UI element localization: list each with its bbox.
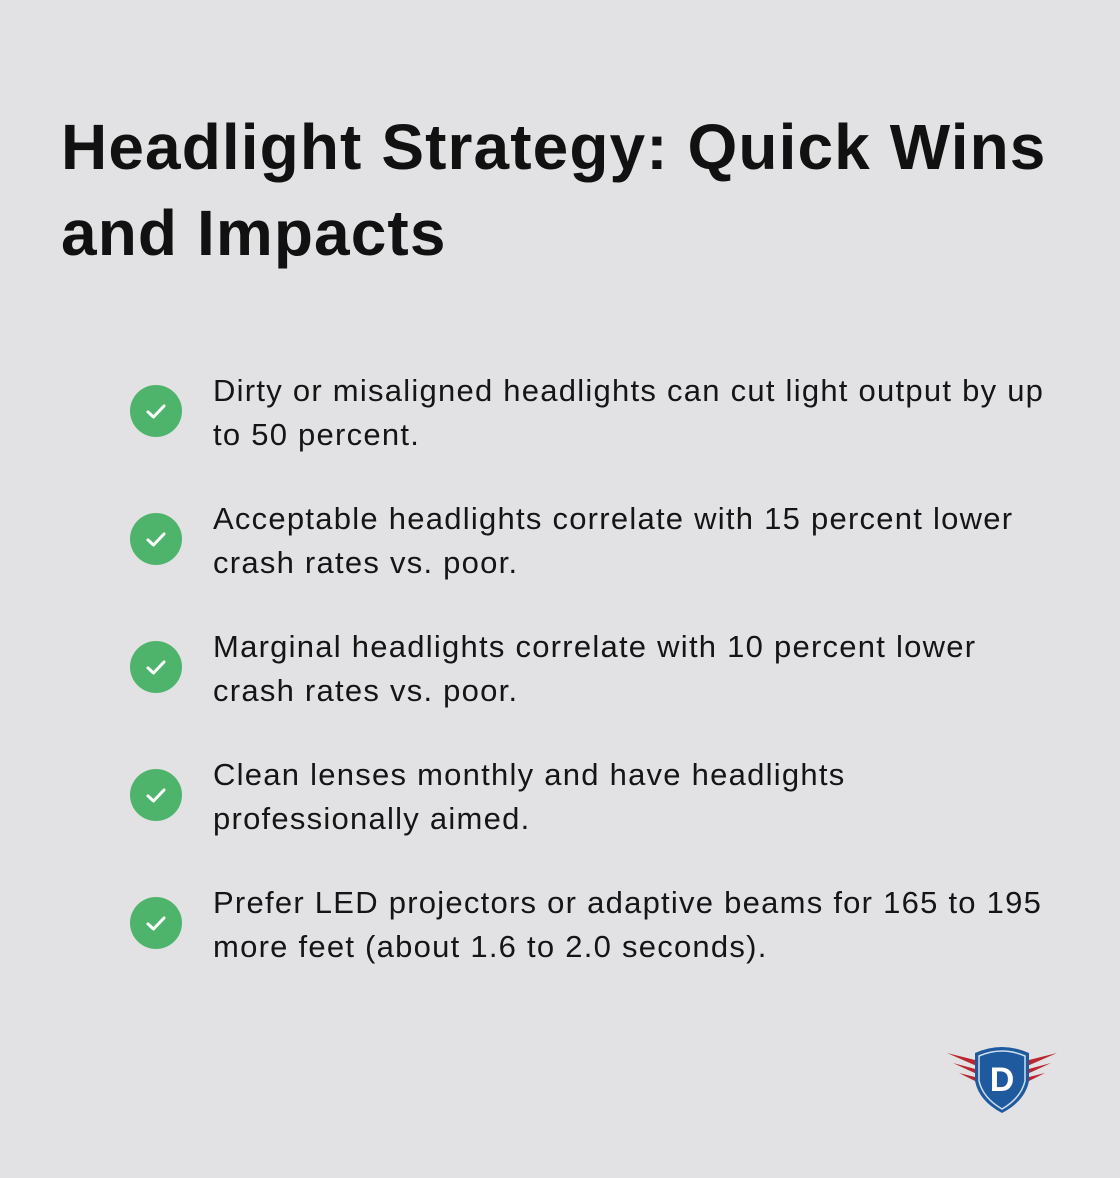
text: Acceptable headlights correlate with 15 percent lower [213, 501, 1013, 536]
icon: check [130, 385, 182, 437]
text [213, 885, 1042, 964]
text [213, 757, 846, 836]
icon: check [130, 769, 182, 821]
logo [947, 1047, 1057, 1113]
text: more feet (about 1.6 to 2.0 seconds). [213, 929, 768, 964]
text: Dirty or misaligned headlights can cut light output by up [213, 373, 1044, 408]
icon: check [130, 513, 182, 565]
item 2 [130, 501, 1013, 580]
text: professionally aimed. [213, 801, 530, 836]
title [61, 111, 1046, 269]
text [213, 373, 1044, 452]
item 5 [130, 885, 1042, 964]
text [213, 629, 976, 708]
text: Prefer LED projectors or adaptive beams for 165 to 195 [213, 885, 1042, 920]
icon: check [130, 641, 182, 693]
text: crash rates vs. poor. [213, 545, 518, 580]
text: Marginal headlights correlate with 10 percent lower [213, 629, 976, 664]
item 3 [130, 629, 976, 708]
item 1 [130, 373, 1044, 452]
title: and Impacts [61, 197, 447, 269]
text [213, 501, 1013, 580]
icon: check [130, 897, 182, 949]
logo: D [990, 1061, 1014, 1099]
title: Headlight Strategy: Quick Wins [61, 111, 1046, 183]
item 4 [130, 757, 846, 836]
text: Clean lenses monthly and have headlights [213, 757, 846, 792]
text: to 50 percent. [213, 417, 420, 452]
text: crash rates vs. poor. [213, 673, 518, 708]
